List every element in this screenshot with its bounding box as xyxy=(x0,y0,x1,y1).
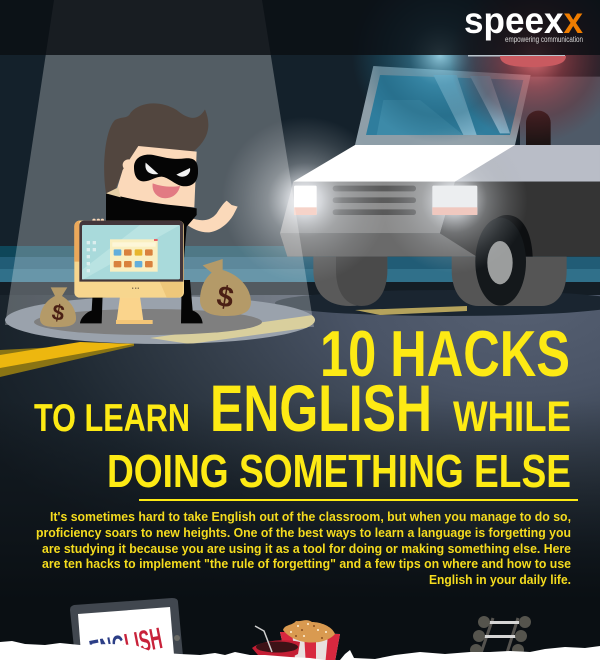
intro paragraph: It's sometimes hard to take English out of the classroom, but when you manage to do so, xyxy=(50,509,571,524)
desktop icons xyxy=(87,241,96,272)
intro paragraph: are studying it because you are using it as a tool for doing or making something else. Here xyxy=(42,541,571,556)
neck shade xyxy=(106,187,121,197)
icon: dumbbell rack xyxy=(470,616,531,656)
right headlight xyxy=(381,127,528,273)
monitor xyxy=(74,221,184,324)
grille xyxy=(333,186,416,215)
teal horizon bands xyxy=(0,246,600,295)
road stripe: left xyxy=(0,342,134,377)
arm xyxy=(186,201,238,232)
background: night sky xyxy=(0,0,600,300)
thief character xyxy=(40,103,251,327)
intro paragraph: proficiency soars to new heights. One of the best ways to learn a language is forgetting you xyxy=(36,525,571,540)
siren glow: blue xyxy=(352,0,528,143)
logo: speexx: speexx xyxy=(464,0,583,41)
spotlight beam xyxy=(5,0,314,327)
siren bar xyxy=(468,55,566,67)
face xyxy=(115,146,197,207)
truck bumper xyxy=(280,233,477,257)
title underline xyxy=(139,499,578,501)
truck cabin side xyxy=(520,77,600,145)
mask xyxy=(134,155,198,186)
pool shadow xyxy=(34,309,262,335)
title: WHILE xyxy=(453,393,571,441)
title xyxy=(34,317,571,497)
rear wheel xyxy=(452,215,567,306)
police truck xyxy=(222,66,600,306)
title: TO LEARN xyxy=(34,397,190,440)
icon: tablet xyxy=(70,598,184,667)
fingers xyxy=(92,219,104,222)
icon: popcorn xyxy=(280,620,340,667)
legs and feet xyxy=(80,280,203,323)
ear xyxy=(123,159,134,171)
side panel light xyxy=(453,145,600,182)
mouth xyxy=(153,183,180,198)
road surface xyxy=(0,280,600,667)
icon: soda cup xyxy=(252,626,300,662)
intro paragraph xyxy=(36,509,571,587)
spotlight pool xyxy=(5,296,315,344)
pool stripe xyxy=(150,314,320,344)
road stripe: right xyxy=(355,306,467,315)
intro paragraph: are ten hacks to implement "the rule of forgetting" and a few tips on where and how to use xyxy=(42,556,571,571)
top dark band xyxy=(0,0,600,55)
truck front panel xyxy=(280,182,455,233)
left headlight xyxy=(222,117,388,283)
folder window xyxy=(110,239,158,272)
hair xyxy=(104,103,208,193)
small money bag: $ xyxy=(50,299,66,326)
torn paper edge xyxy=(0,641,600,667)
body xyxy=(106,193,197,287)
large money bag xyxy=(200,259,251,316)
truck shadow xyxy=(275,290,600,316)
intro paragraph: English in your daily life. xyxy=(429,572,571,587)
icon: tablet: ENGLISH xyxy=(87,622,165,667)
front left wheel xyxy=(313,257,387,306)
large money bag: $ xyxy=(214,279,236,315)
siren glow: red xyxy=(450,0,600,143)
truck dark side xyxy=(440,182,600,257)
side mirror xyxy=(526,111,551,158)
title: ENGLISH xyxy=(210,371,432,445)
small money bag xyxy=(40,287,76,327)
truck hood xyxy=(293,145,515,182)
windshield xyxy=(355,66,531,145)
